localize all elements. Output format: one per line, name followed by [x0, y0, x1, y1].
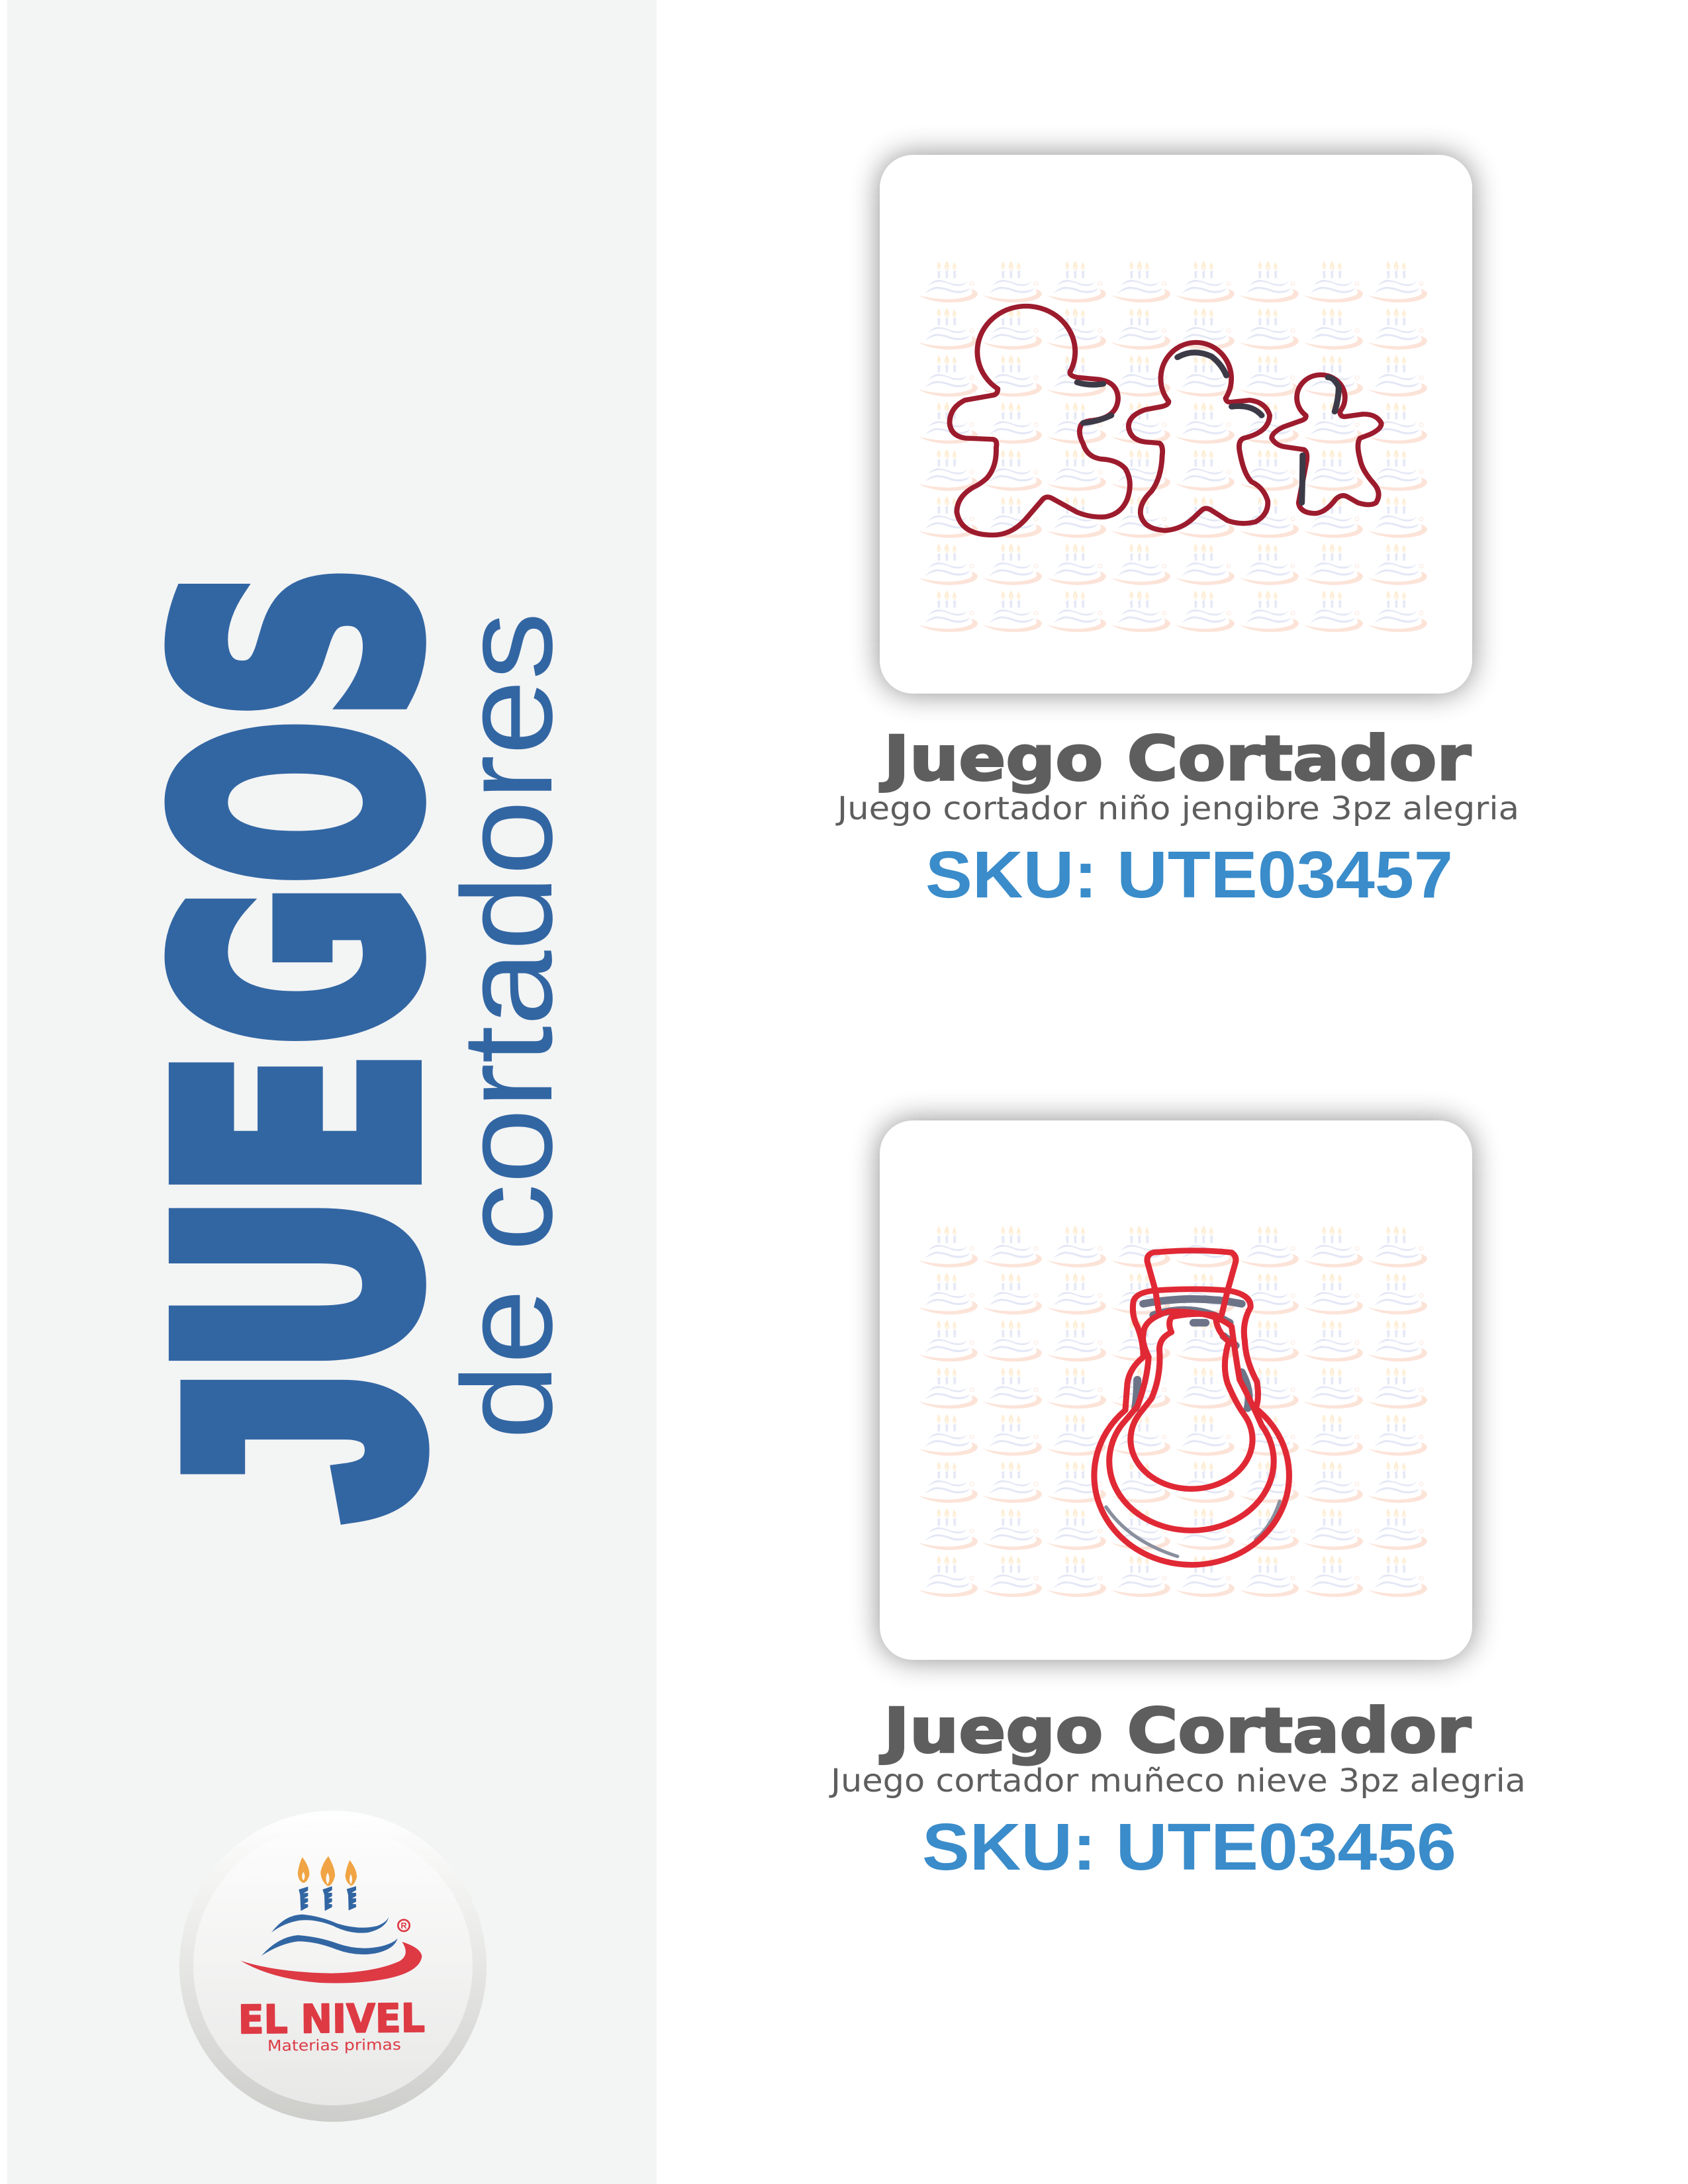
product title 1: Juego Cortador	[879, 723, 1471, 794]
heading: JUEGOS vertical title: U	[115, 1195, 487, 1374]
heading: JUEGOS vertical title: O	[115, 721, 487, 884]
logo badge: El Nivel	[179, 1811, 487, 2122]
product SKU 2: SKU: UTE03456	[922, 1810, 1456, 1884]
panel: product card 1	[880, 155, 1472, 694]
image: three snowman cookie cutters	[1094, 1251, 1289, 1565]
heading: JUEGOS vertical title: S	[115, 565, 487, 719]
heading: de cortadores vertical subtitle: de cortadores	[436, 612, 579, 1439]
heading: JUEGOS vertical title: G	[115, 885, 487, 1045]
product title 2: Juego Cortador	[879, 1695, 1471, 1766]
product SKU 1: SKU: UTE03457	[925, 838, 1453, 912]
heading: JUEGOS vertical title: J	[126, 1374, 479, 1515]
icon: cake with candles	[240, 1856, 422, 1983]
heading: JUEGOS vertical title: E	[115, 1051, 487, 1198]
image: three gingerbread cookie cutters	[950, 306, 1382, 535]
panel: left sidebar	[7, 0, 657, 2184]
brand name: EL NIVEL	[238, 1995, 425, 2042]
product description 1: Juego cortador niño jengibre 3pz alegria	[835, 790, 1519, 827]
brand tagline: Materias primas	[267, 2036, 401, 2055]
product description 2: Juego cortador muñeco nieve 3pz alegria	[829, 1762, 1526, 1799]
panel: product card 2	[880, 1120, 1472, 1660]
icon: cake with candles: R	[400, 1921, 407, 1931]
